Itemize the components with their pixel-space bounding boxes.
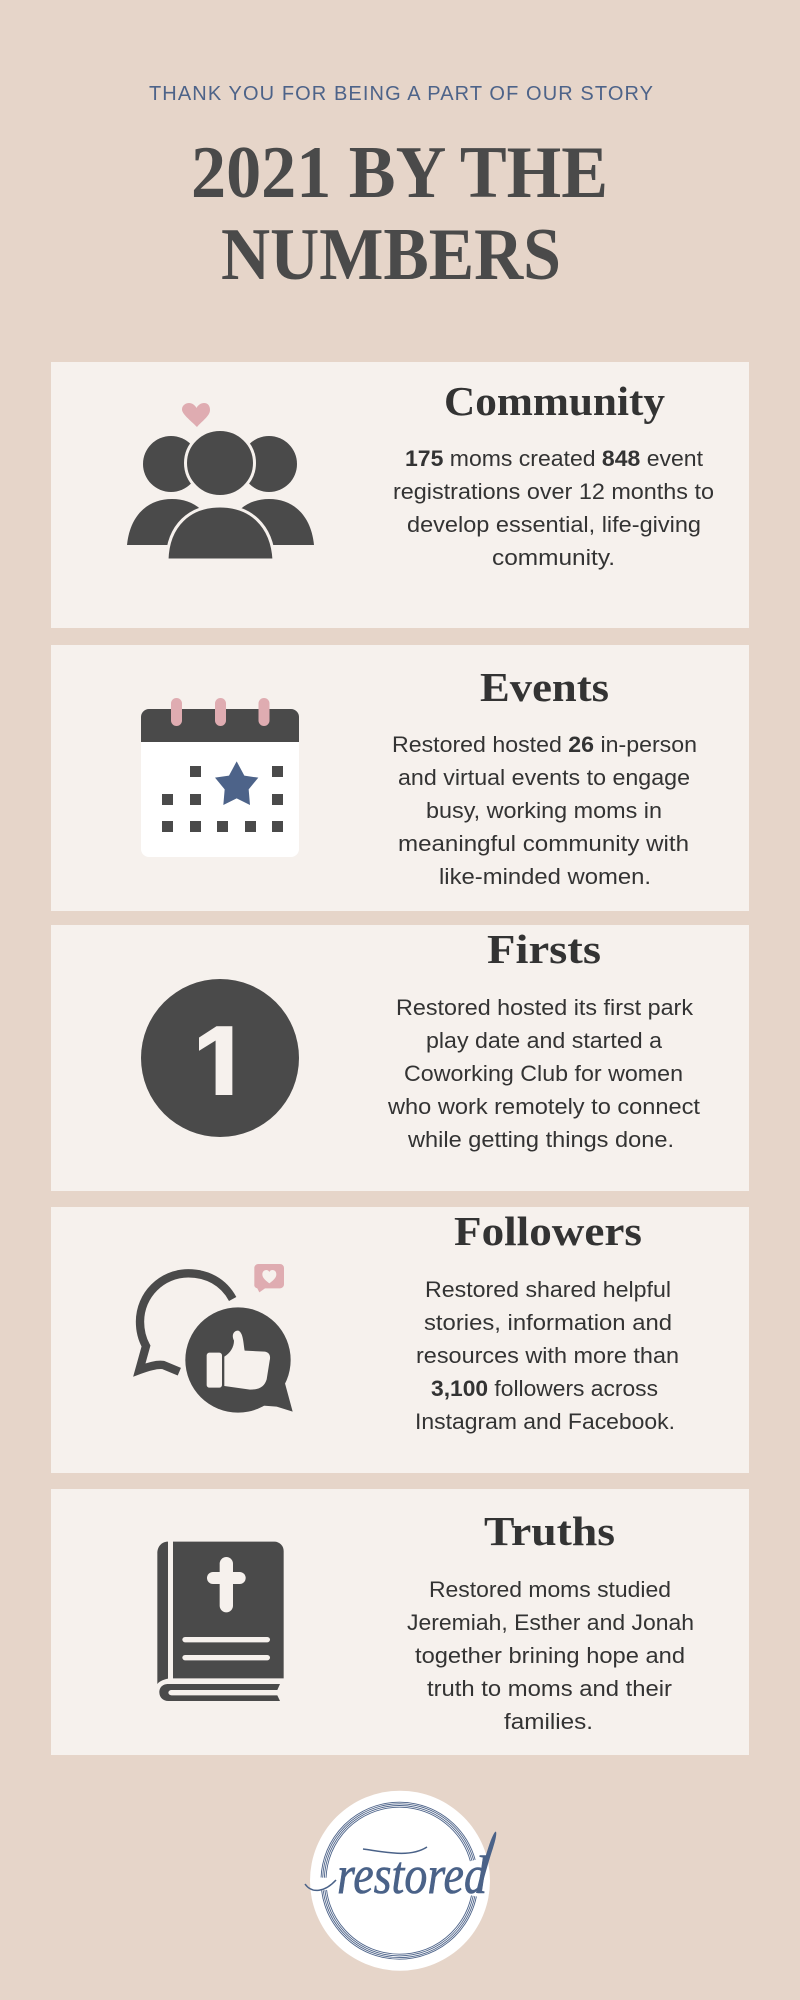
- heading: events: Events: [480, 664, 609, 710]
- heading: truths: Truths: [484, 1508, 615, 1554]
- text: truths: [407, 1577, 694, 1734]
- title: NUMBERS: [221, 214, 561, 296]
- text: followers: [415, 1277, 679, 1434]
- text: events: and virtual events to engage: [398, 765, 690, 790]
- panel: truths: [51, 1489, 749, 1755]
- text: truths: truth to moms and their: [427, 1676, 672, 1701]
- panel: events: [51, 645, 749, 911]
- icon: number one badge: [141, 979, 299, 1137]
- text: truths: Restored moms studied: [429, 1577, 671, 1602]
- panel: community: [51, 362, 749, 628]
- text: community: 175 moms created 848 event: [405, 446, 703, 471]
- panel: followers: [51, 1207, 749, 1473]
- title: [191, 132, 608, 296]
- text: community: [393, 446, 714, 570]
- text: firsts: play date and started a: [426, 1028, 663, 1053]
- text: followers: resources with more than: [416, 1343, 679, 1368]
- text: truths: together brining hope and: [415, 1643, 685, 1668]
- text: followers: stories, information and: [424, 1310, 672, 1335]
- text: truths: families.: [504, 1709, 593, 1734]
- text: followers: Restored shared helpful: [425, 1277, 671, 1302]
- logo: restored: restored: [337, 1845, 488, 1905]
- icon: three people with heart: [127, 403, 314, 564]
- text: events: busy, working moms in: [426, 798, 662, 823]
- text: followers: Instagram and Facebook.: [415, 1409, 675, 1434]
- icon: bible with cross: [157, 1542, 284, 1701]
- text: firsts: Restored hosted its first park: [396, 995, 694, 1020]
- text: firsts: while getting things done.: [407, 1127, 674, 1152]
- icon: number one badge: 1: [187, 1000, 255, 1136]
- text: community: develop essential, life-giving: [407, 512, 701, 537]
- text: community: registrations over 12 months to: [393, 479, 714, 504]
- heading: followers: Followers: [454, 1208, 642, 1254]
- text: events: [392, 732, 697, 889]
- heading: firsts: Firsts: [487, 926, 601, 972]
- text: events: meaningful community with: [398, 831, 689, 856]
- icon: calendar with star: [141, 698, 299, 857]
- heading: community: Community: [444, 378, 666, 424]
- text: firsts: Coworking Club for women: [404, 1061, 683, 1086]
- text: events: like-minded women.: [439, 864, 651, 889]
- text: firsts: who work remotely to connect: [387, 1094, 700, 1119]
- icon: speech bubbles with thumbs up: [139, 1264, 293, 1413]
- title: 2021 BY THE: [191, 132, 608, 214]
- text: events: Restored hosted 26 in-person: [392, 732, 697, 757]
- panel: firsts: [51, 925, 749, 1191]
- logo: restored: [305, 1788, 496, 1974]
- text: followers: 3,100 followers across: [431, 1376, 658, 1401]
- text: firsts: [387, 995, 700, 1152]
- text: truths: Jeremiah, Esther and Jonah: [407, 1610, 694, 1635]
- text: community: community.: [492, 545, 615, 570]
- subtitle: THANK YOU FOR BEING A PART OF OUR STORY: [149, 83, 653, 105]
